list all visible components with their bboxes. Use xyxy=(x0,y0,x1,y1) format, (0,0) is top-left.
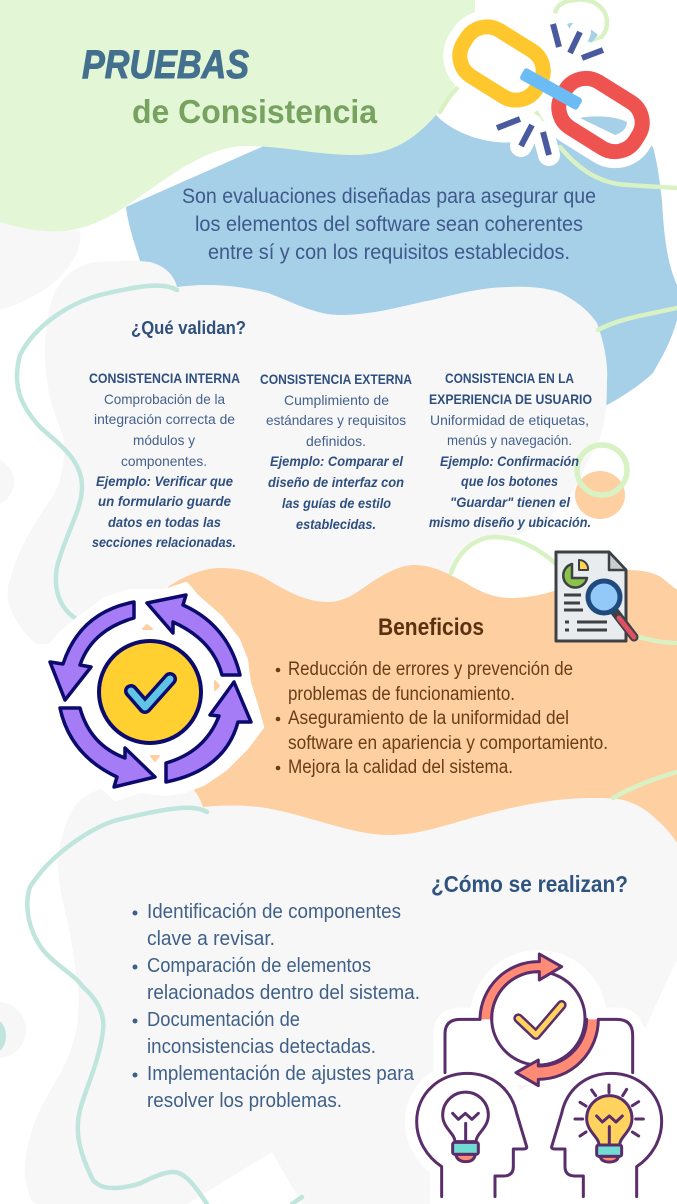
column: consistencia externa: diseño de interfaz con xyxy=(268,474,404,490)
column: consistencia interna: integración correcta de xyxy=(94,411,235,427)
column: consistencia en la experiencia de usuario: que los botones xyxy=(461,473,558,489)
benefits list: problemas de funcionamiento. xyxy=(288,684,515,705)
how-to list xyxy=(132,901,420,1112)
column: consistencia en la experiencia de usuario: Uniformidad de etiquetas, xyxy=(430,412,589,428)
column: consistencia interna: datos en todas las xyxy=(108,514,221,530)
how-to list: Implementación de ajustes para xyxy=(147,1063,415,1085)
column: consistencia externa: Cumplimiento de xyxy=(284,392,389,408)
column: consistencia interna: Ejemplo: Verificar que xyxy=(96,473,233,489)
icon: two heads with light bulbs and cycle xyxy=(417,954,662,1204)
column: consistencia externa: CONSISTENCIA EXTERNA xyxy=(260,371,412,387)
intro text xyxy=(182,185,596,264)
column: consistencia interna: secciones relacionadas. xyxy=(92,534,236,550)
column: consistencia en la experiencia de usuario: menús y navegación. xyxy=(447,432,572,448)
how-to list: Identificación de componentes xyxy=(147,901,401,923)
column: consistencia en la experiencia de usuario: mismo diseño y ubicación. xyxy=(429,514,591,530)
benefits list xyxy=(276,659,608,778)
benefits list: Aseguramiento de la uniformidad del xyxy=(288,708,569,729)
how-to list: relacionados dentro del sistema. xyxy=(147,982,420,1004)
column: consistencia externa: las guías de estilo xyxy=(282,495,391,511)
benefits list: software en apariencia y comportamiento. xyxy=(288,733,608,754)
column: consistencia interna: CONSISTENCIA INTERNA xyxy=(89,370,240,386)
benefits list: Mejora la calidad del sistema. xyxy=(288,757,513,778)
column: consistencia externa: Ejemplo: Comparar el xyxy=(270,453,404,469)
how-to list: Comparación de elementos xyxy=(147,955,371,977)
column: consistencia interna: componentes. xyxy=(121,453,207,469)
icon: document with magnifier xyxy=(556,552,634,641)
column: consistencia en la experiencia de usuario: EXPERIENCIA DE USUARIO xyxy=(429,391,592,407)
intro text: los elementos del software sean coherentes xyxy=(195,213,583,236)
column: consistencia interna xyxy=(89,370,240,550)
column: consistencia externa: estándares y requisitos xyxy=(266,412,406,428)
heading: qué validan: ¿Qué validan? xyxy=(131,318,246,338)
column: consistencia externa: establecidas. xyxy=(296,516,376,532)
how-to list: resolver los problemas. xyxy=(147,1090,342,1112)
title: PRUEBAS xyxy=(82,43,249,87)
intro text: entre sí y con los requisitos establecidos. xyxy=(208,241,570,264)
icon: broken chain xyxy=(451,18,651,161)
column: consistencia en la experiencia de usuario: CONSISTENCIA EN LA xyxy=(445,370,574,386)
column: consistencia interna: un formulario guarde xyxy=(98,493,231,509)
benefits list: Reducción de errores y prevención de xyxy=(288,659,573,680)
how-to list: Documentación de xyxy=(147,1009,300,1031)
column: consistencia en la experiencia de usuario: "Guardar" tienen el xyxy=(450,494,571,510)
title: de Consistencia xyxy=(132,93,378,130)
column: consistencia en la experiencia de usuario: Ejemplo: Confirmación xyxy=(440,453,579,469)
column: consistencia en la experiencia de usuario xyxy=(429,370,592,530)
heading: cómo se realizan: ¿Cómo se realizan? xyxy=(431,871,628,897)
icon: cycle with check xyxy=(42,585,261,798)
intro text: Son evaluaciones diseñadas para asegurar que xyxy=(182,185,596,208)
column: consistencia externa xyxy=(260,371,412,532)
heading: beneficios: Beneficios xyxy=(378,614,484,641)
column: consistencia externa: definidos. xyxy=(306,433,366,449)
how-to list: inconsistencias detectadas. xyxy=(147,1036,376,1058)
title xyxy=(82,43,378,130)
column: consistencia interna: Comprobación de la xyxy=(104,391,225,407)
how-to list: clave a revisar. xyxy=(147,928,275,950)
column: consistencia interna: módulos y xyxy=(133,432,195,448)
